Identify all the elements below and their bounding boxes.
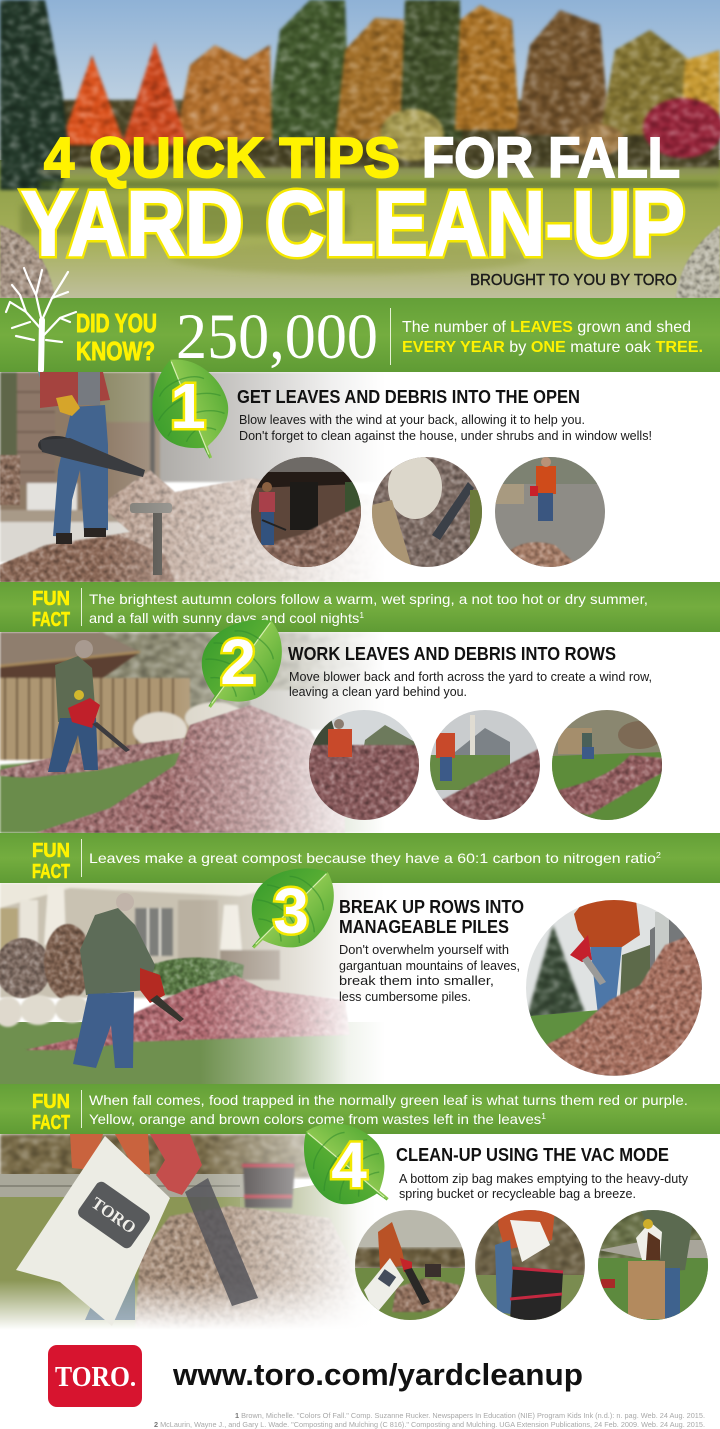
text: tip 4: spring bucket or recycleable bag a breeze. [399, 1187, 636, 1201]
photo circle: man on patio [494, 456, 606, 568]
person with jacket [73, 893, 184, 1068]
leaf badge 3 [226, 845, 354, 974]
fact text: EVERY YEAR by ONE mature oak TREE. [402, 339, 703, 356]
title: 4 quick tips for fall [44, 126, 680, 190]
fun fact label: FACT [32, 861, 70, 883]
text: tip 4 [399, 1172, 689, 1201]
heading: tip 1: GET LEAVES AND DEBRIS INTO THE OPEN [237, 387, 580, 407]
url: www.toro.com/yardcleanup [172, 1357, 583, 1392]
fun fact label [32, 1091, 70, 1134]
panel: tip 1 photo [0, 372, 400, 582]
photo circle: man with vac bag [354, 1209, 466, 1321]
hero photo: autumn trees and lawn [0, 0, 720, 298]
text: tip 1 [239, 413, 652, 443]
fun fact text [89, 591, 648, 626]
photo circle: long row of leaves [552, 709, 664, 822]
fun fact label: FUN [32, 840, 70, 862]
text: tip 2: leaving a clean yard behind you. [289, 685, 467, 699]
text: tip 4: A bottom zip bag makes emptying to the heavy-duty [399, 1172, 689, 1186]
panel: fun fact 3 [0, 1084, 720, 1134]
panel: did you know banner [0, 268, 720, 373]
leaf badge 3: 3 [273, 875, 309, 947]
panel: tip 4 photo [0, 1134, 358, 1328]
person with blower [38, 372, 145, 544]
leaf badge 2 [178, 599, 302, 729]
blower bag with TORO tag: TORO [88, 1193, 140, 1237]
photo circle: man and house [430, 709, 542, 822]
blower bag with TORO tag [16, 1134, 258, 1326]
footnotes [154, 1411, 705, 1429]
heading: tip 2: WORK LEAVES AND DEBRIS INTO ROWS [288, 644, 616, 664]
did you know text: KNOW? [76, 336, 155, 366]
text: tip 3: gargantuan mountains of leaves, [339, 959, 520, 973]
logo: TORO: TORO [55, 1361, 130, 1393]
photo circle: blower over rocks [372, 455, 484, 568]
fun fact text: 1 [541, 1112, 547, 1121]
fun fact text: and a fall with sunny days and cool nights [89, 610, 347, 626]
text: tip 3: Don't overwhelm yourself with [339, 943, 509, 957]
title: 4 quick tips for fall: 4 QUICK TIPS [44, 126, 400, 190]
footnotes: 2 McLaurin, Wayne J., and Gary L. Wade. "Composting and Mulching (C 816)." Composting and Mulching. UGA Extension Publications, 24 Feb. 2009. Web. 24 Aug. 2015. [154, 1420, 705, 1429]
text: tip 2 [289, 670, 652, 699]
fun fact text: Leaves make a great compost because they have a 60:1 carbon to nitrogen ratio [89, 850, 589, 866]
photo circle: emptying into bucket [474, 1209, 586, 1321]
big number: 250,000 [176, 301, 378, 373]
fact text: The number of LEAVES grown and shed [402, 319, 691, 336]
fun fact label [32, 588, 70, 631]
photo circle: emptying into paper bag [598, 1209, 710, 1321]
leaf badge 4 [282, 1103, 411, 1229]
fun fact text [89, 1092, 688, 1127]
text: tip 3 [339, 943, 520, 1004]
heading: tip 3: MANAGEABLE PILES [339, 917, 509, 937]
icon: bare white tree [6, 268, 76, 370]
fun fact text: Yellow, orange and brown colors come from wastes left in the leaves [89, 1111, 513, 1127]
text: tip 3: break them into smaller, [339, 974, 494, 988]
fun fact text: The brightest autumn colors follow a warm, wet spring, a not too hot or dry summer, [89, 591, 648, 607]
credit line: BROUGHT TO YOU BY TORO [470, 272, 677, 289]
fun fact label: FACT [32, 1112, 70, 1134]
fun fact text: When fall comes, food trapped in the normally green leaf is what turns them red or purple. [89, 1092, 688, 1108]
logo: TORO [48, 1345, 142, 1407]
panel: fun fact 2 [0, 833, 720, 883]
leaf badge 4: 4 [331, 1129, 367, 1201]
text: tip 2: Move blower back and forth across the yard to create a wind row, [289, 670, 652, 684]
leaf badge 1 [135, 346, 245, 472]
leaf badge 2: 2 [220, 626, 256, 698]
fun fact label [32, 840, 70, 883]
did you know text [76, 308, 157, 366]
panel: fun fact 1 [0, 582, 720, 632]
text: tip 3: less cumbersome piles. [339, 990, 471, 1004]
fun fact label: FUN [32, 1091, 70, 1113]
fun fact label: FACT [32, 609, 70, 631]
heading: tip 3 [339, 897, 524, 937]
footnotes: 1 Brown, Michelle. "Colors Of Fall." Comp. Suzanne Rucker. Newspapers In Education (NIE) Program Kids Ink (n.d.): n. pag. Web. 24 Aug. 2015. [235, 1411, 705, 1420]
photo circle: man blowing row [308, 709, 420, 822]
photo circle: woman at house [250, 456, 362, 568]
fun fact label: FUN [32, 588, 70, 610]
person with red blower [48, 640, 130, 772]
did you know text: DID YOU [76, 308, 157, 338]
panel: tip 2 photo [0, 632, 400, 833]
fact text [402, 319, 703, 356]
title: 4 quick tips for fall: FOR FALL [422, 126, 680, 190]
panel: tip 3 photo [0, 883, 400, 1084]
photo circle: person above leaf pile [526, 900, 702, 1076]
heading: tip 3: BREAK UP ROWS INTO [339, 897, 524, 917]
heading: tip 4: CLEAN-UP USING THE VAC MODE [396, 1145, 669, 1165]
text: tip 1: Don't forget to clean against the house, under shrubs and in window wells! [239, 429, 652, 443]
leaf badge 1: 1 [170, 370, 206, 442]
fun fact text: 2 [656, 851, 662, 860]
text: tip 1: Blow leaves with the wind at your back, allowing it to help you. [239, 413, 585, 427]
fun fact text: 1 [359, 611, 365, 620]
